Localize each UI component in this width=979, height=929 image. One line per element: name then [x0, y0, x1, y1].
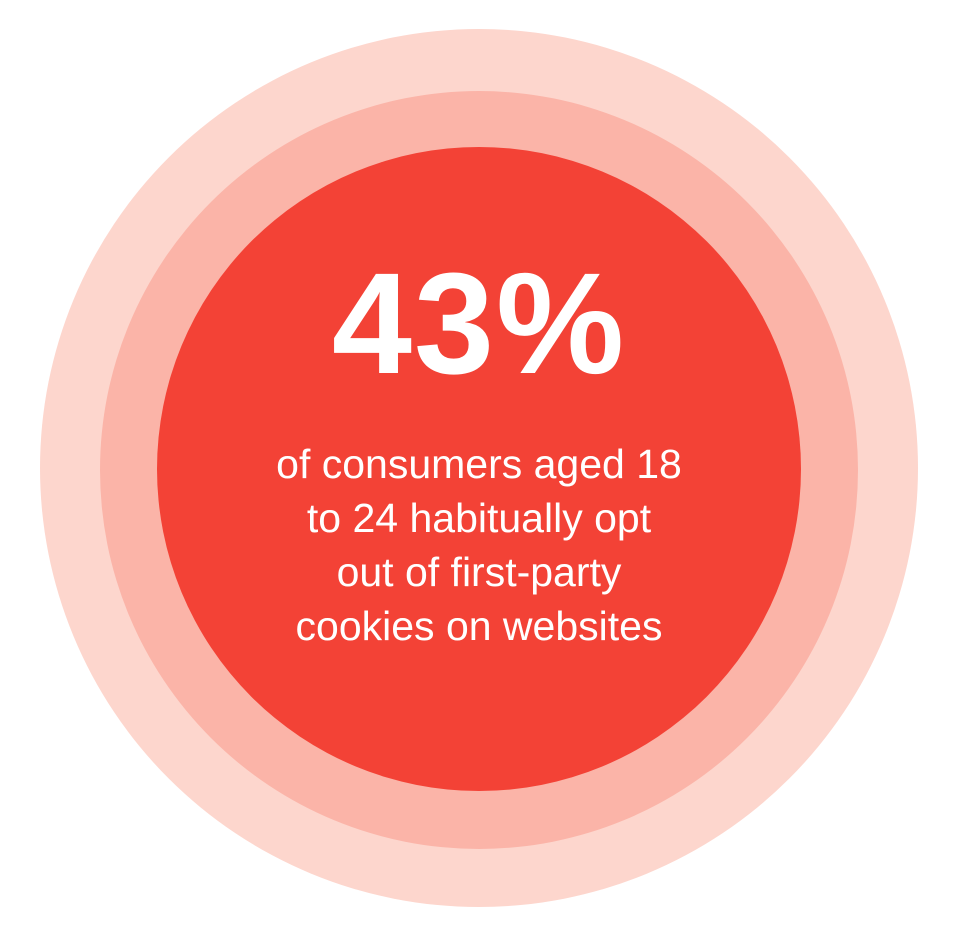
middle circle — [100, 91, 858, 849]
description text: of consumers aged 18 — [276, 441, 682, 487]
description text: out of first-party — [337, 549, 621, 595]
inner circle — [157, 147, 801, 791]
description text — [276, 441, 682, 649]
description text: cookies on websites — [296, 603, 662, 649]
headline: 43%: 43% — [332, 243, 626, 404]
description text: to 24 habitually opt — [307, 495, 651, 541]
